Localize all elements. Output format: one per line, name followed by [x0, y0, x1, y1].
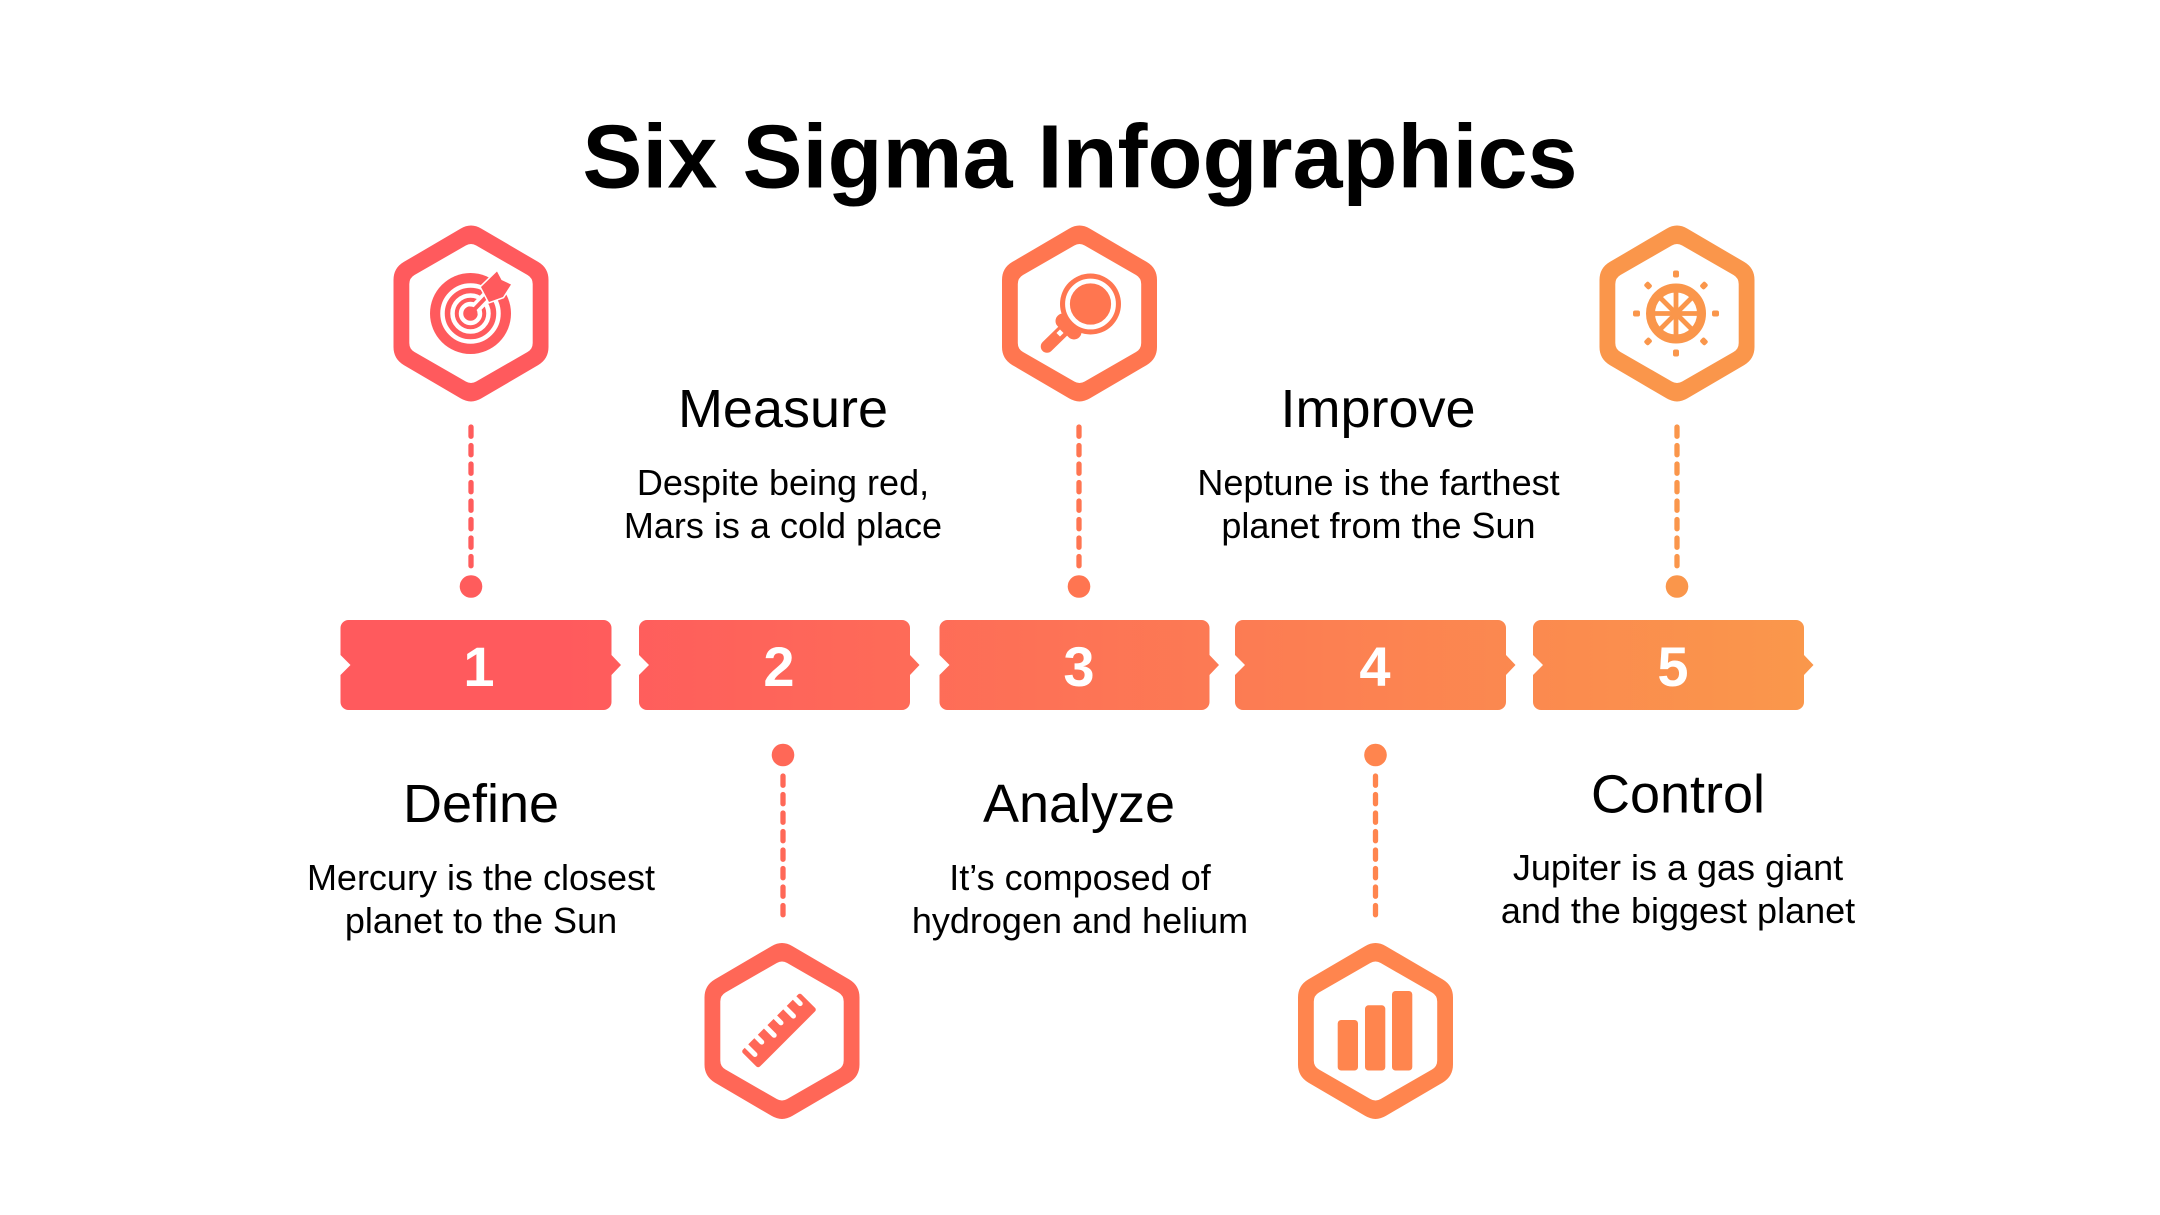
step 2: measure [624, 379, 942, 1119]
hexagon icon: target [394, 226, 548, 401]
text: improve description: planet from the Sun [1221, 505, 1536, 546]
arrow block 1 [340, 620, 621, 710]
text: analyze description: hydrogen and helium [912, 900, 1248, 941]
heading: define: Define [403, 774, 559, 834]
arrow block 5 [1533, 620, 1814, 710]
step 4: improve [1197, 379, 1560, 1119]
step 5: control [1501, 226, 1855, 931]
title: Six Sigma Infographics [582, 108, 1578, 208]
arrow block 2 [639, 620, 920, 710]
arrow block 3: 3 [1063, 635, 1095, 698]
connector: step 5 [1666, 427, 1688, 598]
hexagon icon: bar chart [1298, 943, 1453, 1119]
hexagon icon: magnifying glass [1002, 226, 1157, 401]
heading: analyze: Analyze [983, 774, 1175, 834]
connector: step 4 [1364, 744, 1387, 915]
text: measure description: Despite being red, [637, 462, 929, 503]
arrow block 1: 1 [463, 635, 495, 698]
timeline: numbered arrows [340, 620, 1814, 710]
heading: improve: Improve [1280, 379, 1476, 439]
heading: measure: Measure [678, 379, 888, 439]
text: analyze description: It’s composed of [949, 857, 1212, 898]
arrow block 2: 2 [763, 635, 795, 698]
connector: step 3 [1068, 427, 1090, 598]
text: control description: Jupiter is a gas giant [1513, 847, 1843, 888]
step 1: define [307, 226, 655, 941]
arrow block 4: 4 [1359, 635, 1391, 698]
connector: step 1 [460, 427, 482, 598]
text: define description: Mercury is the closest [307, 857, 655, 898]
arrow block 5: 5 [1657, 635, 1689, 698]
text: define description: planet to the Sun [345, 900, 617, 941]
text: control description: and the biggest planet [1501, 890, 1855, 931]
connector: step 2 [772, 744, 794, 915]
arrow block 3 [940, 620, 1219, 710]
arrow block 4 [1235, 620, 1516, 710]
text: measure description: Mars is a cold place [624, 505, 942, 546]
text: improve description: Neptune is the farthest [1197, 462, 1560, 503]
step 3: analyze [912, 226, 1248, 941]
hexagon icon: ruler [704, 943, 860, 1119]
hexagon icon: ship wheel [1600, 226, 1754, 401]
heading: control: Control [1591, 764, 1765, 824]
